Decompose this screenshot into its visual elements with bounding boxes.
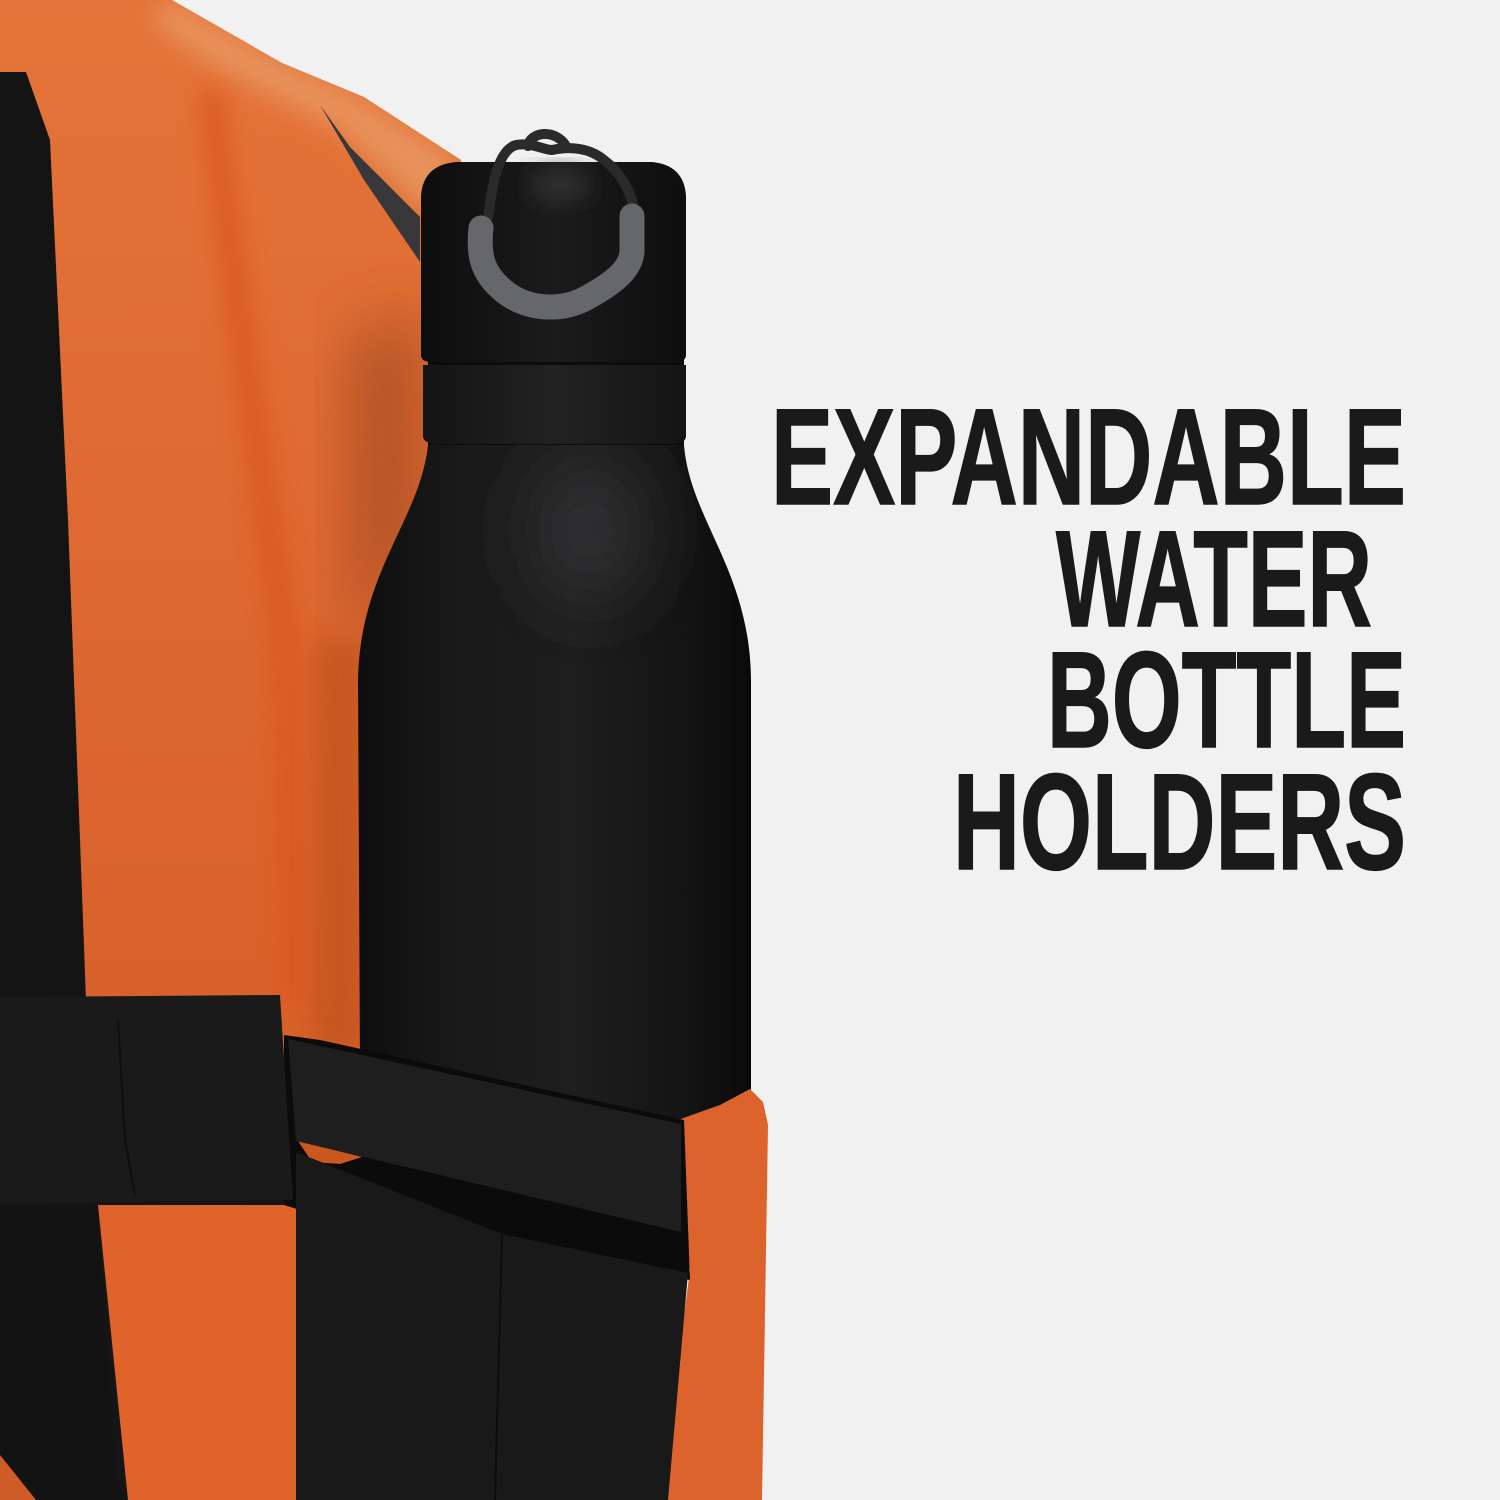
cord loop	[488, 134, 633, 218]
orange gap above pocket	[298, 1141, 362, 1164]
lower black strip	[0, 1205, 128, 1500]
fabric shading	[150, 0, 460, 1050]
title: expandable water bottle holders	[771, 381, 1406, 899]
backpack	[0, 0, 461, 1500]
cap highlight	[530, 171, 590, 199]
lower orange panel	[98, 1205, 297, 1500]
zip opening	[320, 105, 420, 262]
strap stitching	[118, 1020, 135, 1195]
elastic band	[288, 1039, 681, 1232]
black webbing strip	[0, 72, 86, 1000]
lower left corner fabric	[0, 1455, 36, 1500]
right orange pocket	[660, 1089, 768, 1500]
mesh pocket	[296, 1152, 688, 1500]
neck base	[428, 340, 684, 450]
pocket inner dark	[284, 1035, 690, 1280]
grey handle	[480, 216, 632, 307]
panel: orange backpack body	[0, 0, 461, 1070]
bottle body	[358, 445, 751, 1130]
black elastic straps	[0, 995, 690, 1500]
bottle shine	[540, 460, 640, 600]
pocket seam	[495, 1234, 502, 1500]
water bottle	[358, 134, 751, 1130]
bottle cap	[421, 162, 686, 362]
waist strap	[0, 995, 293, 1203]
bottle collar	[423, 365, 686, 444]
dark base behind straps	[0, 1190, 300, 1500]
